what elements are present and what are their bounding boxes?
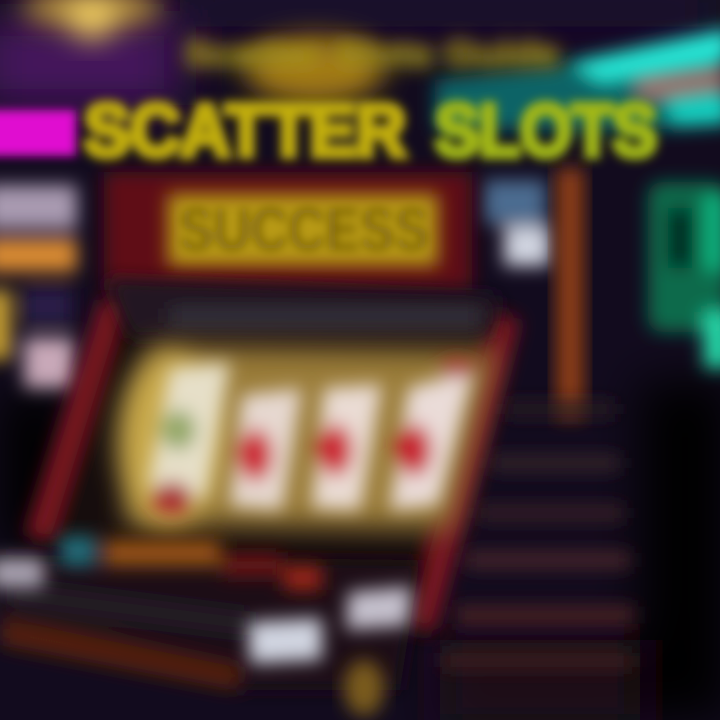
panel: left side lights	[0, 185, 77, 388]
staircase	[442, 402, 635, 668]
machine side frames	[25, 290, 520, 640]
orange vertical pole	[556, 168, 584, 418]
panel: cyan neon bands	[435, 28, 720, 130]
machine top panel	[104, 172, 472, 290]
indicator lights strip	[60, 536, 322, 590]
panel: white sign behind machine	[484, 180, 550, 266]
buttons	[0, 558, 412, 664]
console	[0, 555, 420, 690]
shelf under sign	[105, 278, 500, 338]
heading: tagline: Scatter Slots Guide	[184, 33, 560, 74]
icon: gold ceiling light	[22, 0, 162, 40]
coin tray	[344, 660, 384, 716]
reel 2	[230, 388, 302, 510]
panel: right green neon	[648, 182, 720, 368]
reel 1	[148, 362, 230, 514]
reels window	[118, 345, 495, 530]
reel 3	[312, 384, 382, 510]
heading: slots: SLOTS	[435, 89, 657, 172]
reel 4	[390, 359, 476, 510]
panel: slot machine body	[0, 172, 520, 716]
panel: magenta neon strip	[0, 110, 76, 156]
icon: gold crest	[245, 36, 385, 104]
heading: scatter: SCATTER	[84, 89, 406, 172]
sign: success plate: SUCCESS	[179, 196, 429, 263]
